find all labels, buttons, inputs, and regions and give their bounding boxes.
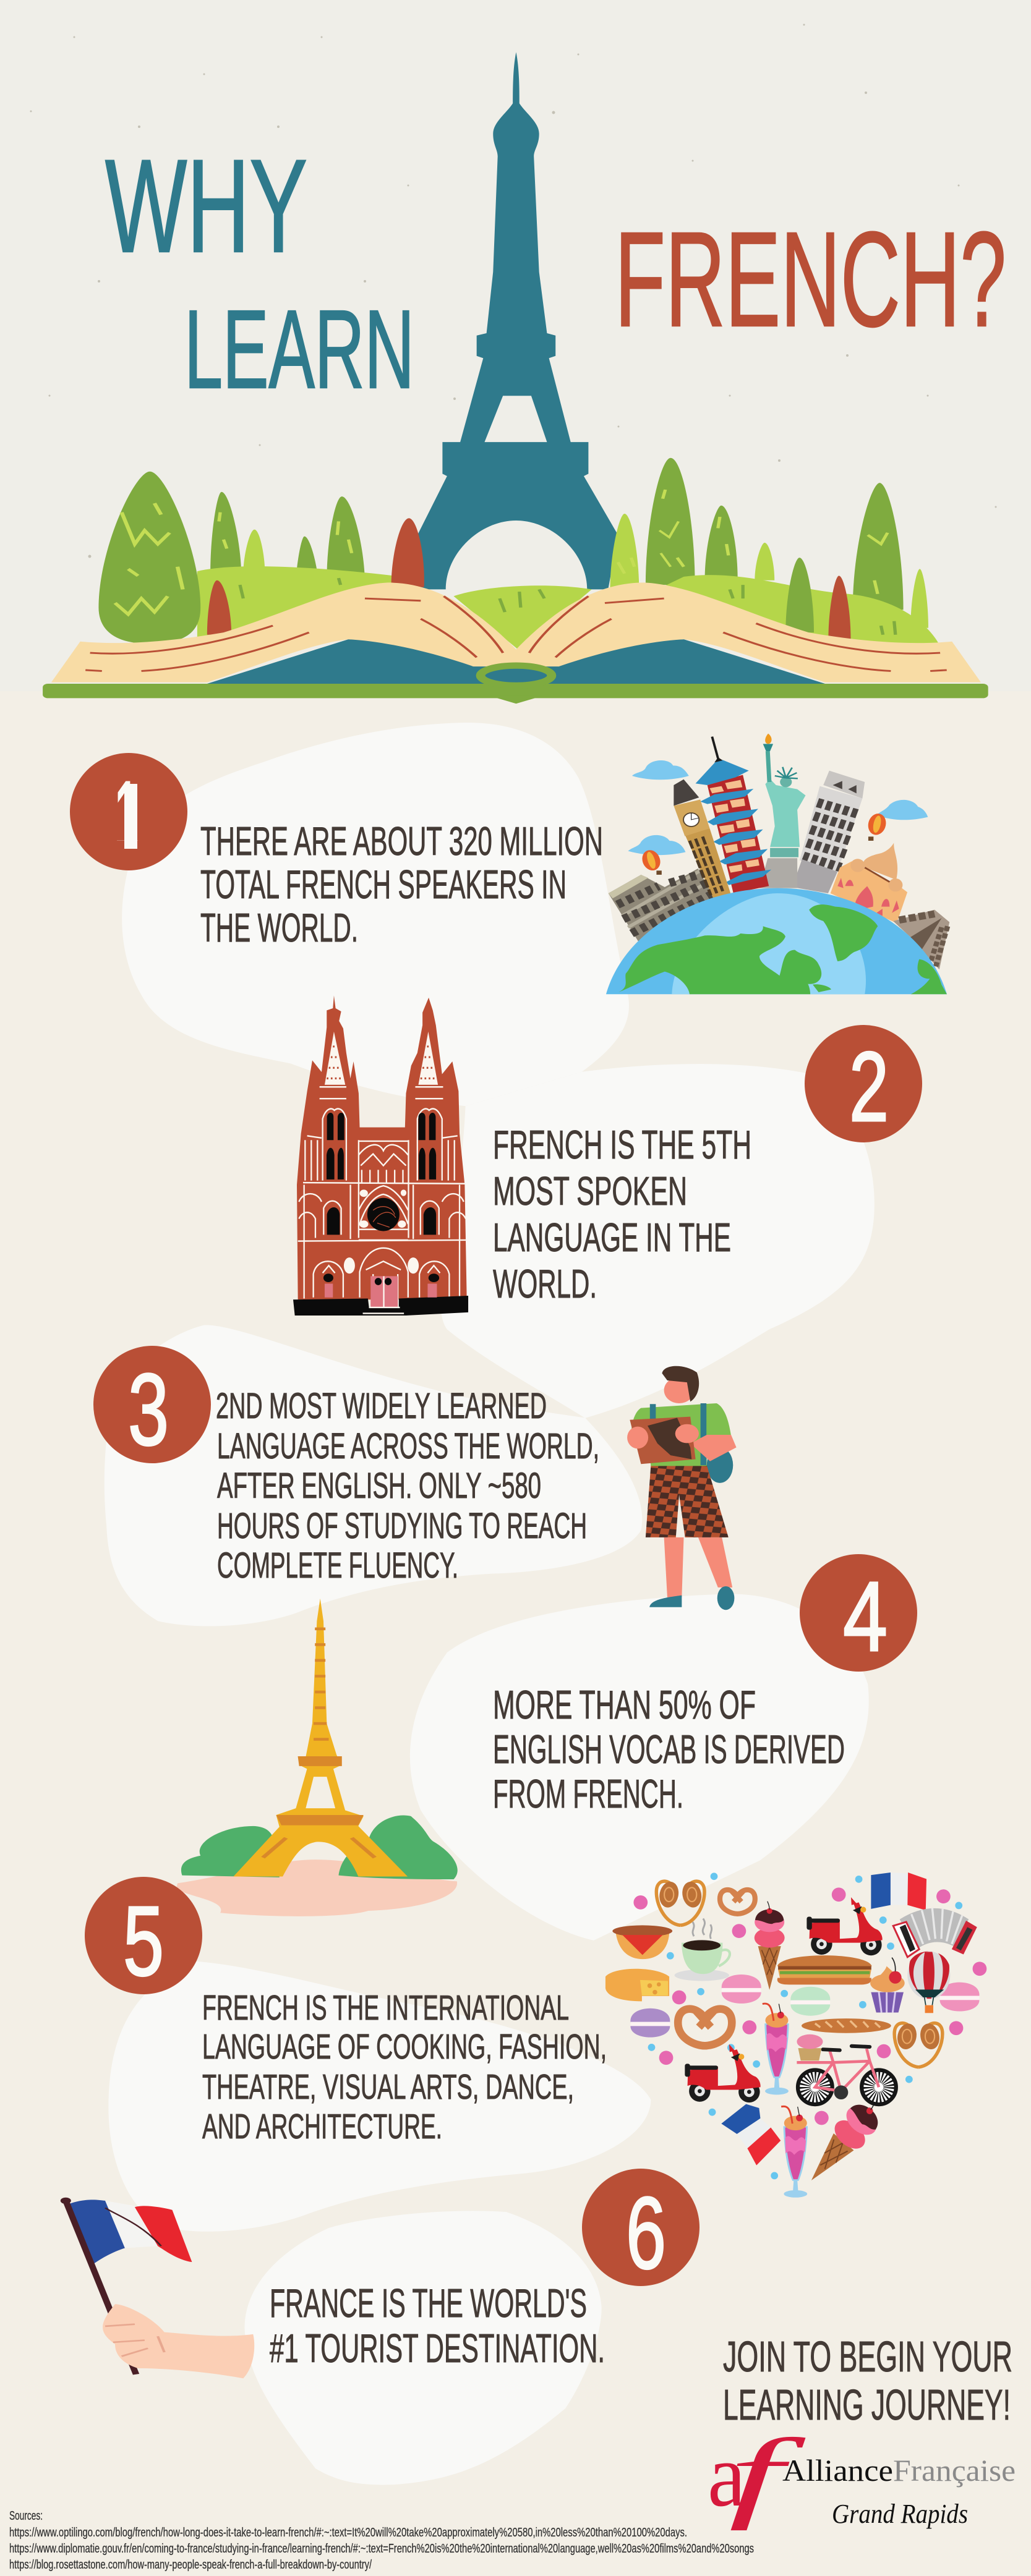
text block: fact 5: FRENCH IS THE INTERNATIONAL (202, 1988, 569, 2028)
sources: Sources: (9, 2509, 43, 2523)
logo: Alliance Française Grand Rapids: Grand Rapids (832, 2499, 968, 2529)
accordion (893, 1908, 977, 1957)
french flag bottom (721, 2104, 781, 2166)
bicycle (797, 2034, 896, 2104)
logo: Alliance Française Grand Rapids: Française (893, 2453, 1016, 2488)
pyramid (893, 910, 949, 969)
badge: number 1 (70, 753, 187, 870)
sandwich (777, 1955, 872, 1984)
book inner blue (207, 639, 825, 684)
badge: number 6: 6 (626, 2176, 666, 2290)
milkshakes (763, 2004, 789, 2094)
call to action (723, 2332, 1012, 2429)
header background panel (0, 0, 1031, 691)
logo: Alliance Française Grand Rapids: f (729, 2418, 806, 2531)
text block: fact 5 (202, 1988, 607, 2146)
colosseum (609, 867, 714, 942)
badge: number 6 (582, 2169, 699, 2290)
coffee cup (675, 1918, 730, 1981)
panel: blob 1 background (122, 723, 629, 1106)
illustration: golden Eiffel tower with bushes (176, 1599, 458, 1916)
title: WHY: WHY (105, 132, 307, 280)
text block: fact 1: TOTAL FRENCH SPEAKERS IN (200, 862, 567, 907)
text block: fact 2: FRENCH IS THE 5TH (493, 1122, 751, 1167)
clouds (628, 760, 928, 855)
text block: fact 2: MOST SPOKEN (493, 1168, 687, 1214)
text block: fact 5: LANGUAGE OF COOKING, FASHION, (202, 2027, 607, 2067)
text block: fact 3: HOURS OF STUDYING TO REACH (217, 1506, 587, 1546)
badge: number 2 (805, 1025, 922, 1142)
blue dots (648, 1872, 962, 2179)
book spine ring (481, 666, 552, 686)
globe (606, 888, 947, 994)
badge: number 2: 2 (849, 1031, 889, 1142)
book right page (513, 582, 981, 682)
scooters (806, 1897, 883, 1955)
pink dots (633, 1887, 986, 2125)
text block: fact 6: #1 TOURIST DESTINATION. (270, 2326, 605, 2371)
text block: fact 2: LANGUAGE IN THE (493, 1215, 731, 1260)
badge: number 1: 1 (114, 762, 140, 870)
illustration: traveler reading a map (627, 1366, 737, 1610)
text block: fact 4: MORE THAN 50% OF (493, 1682, 756, 1727)
baguette (802, 2018, 891, 2033)
badge: number 5 (85, 1877, 202, 1996)
badge: number 4 (800, 1554, 917, 1672)
logo: Alliance Française Grand Rapids (708, 2418, 1016, 2531)
logo: Alliance Française Grand Rapids: a (708, 2425, 746, 2525)
text block: fact 6 (270, 2281, 605, 2371)
text block: fact 2 (493, 1122, 751, 1306)
badge: number 3 (93, 1346, 211, 1466)
illustration: gothic cathedral (293, 995, 468, 1316)
tart (612, 1925, 672, 1959)
pretzels (720, 1890, 755, 1914)
panel: blob 4 background (410, 1594, 869, 1941)
logo: Alliance Française Grand Rapids: Alliance (782, 2453, 893, 2488)
hot air balloon (907, 1952, 950, 2013)
big ben (674, 780, 730, 898)
statue of liberty (759, 734, 806, 888)
text block: fact 3: LANGUAGE ACROSS THE WORLD, (217, 1426, 599, 1466)
text block: fact 4 (493, 1682, 845, 1816)
badge: number 4: 4 (843, 1561, 888, 1672)
text block: fact 3 (216, 1386, 599, 1586)
header illustration: Eiffel tower on open book with trees (43, 52, 988, 704)
text block: fact 5: AND ARCHITECTURE. (202, 2107, 442, 2146)
hot air balloons (640, 812, 888, 875)
sources (9, 2509, 754, 2572)
text block: fact 3: AFTER ENGLISH. ONLY ~580 (217, 1466, 541, 1506)
panel: blob 3 background (105, 1325, 642, 1626)
book cover base (43, 684, 988, 698)
text block: fact 6: FRANCE IS THE WORLD'S (270, 2281, 587, 2326)
cheese (605, 1969, 669, 2001)
illustration: heart of French food and icons (605, 1872, 986, 2198)
text block: fact 4: FROM FRENCH. (493, 1771, 683, 1816)
french flag top (871, 1872, 926, 1910)
pagoda (696, 737, 771, 893)
macarons (722, 1975, 761, 2004)
trees front row (98, 472, 200, 644)
sources: https://blog.rosettastone.com/how-many-people-speak-french-a-full-breakdown-by-country/ (9, 2558, 372, 2572)
text block: fact 1: THE WORLD. (200, 905, 358, 950)
illustration: hand holding french flag (61, 2198, 254, 2378)
text block: fact 2: WORLD. (493, 1261, 597, 1306)
text block: fact 1 (200, 818, 603, 950)
sources: https://www.diplomatie.gouv.fr/en/coming-to-france/studying-in-france/learning-french/#:~:text=French%20is%20the%20international%20language,well%20as%20films%20and%20songs (9, 2542, 754, 2556)
illustration: globe with world monuments (606, 734, 949, 994)
sources: https://www.optilingo.com/blog/french/how-long-does-it-take-to-learn-french/#:~:text=It%20will%20take%20approximately%20580,in%20less%20than%20100%20days. (9, 2526, 687, 2540)
badge: number 5: 5 (123, 1885, 164, 1996)
cupcake (870, 1958, 905, 2012)
text block: fact 1: THERE ARE ABOUT 320 MILLION (200, 818, 603, 864)
book left page (51, 582, 520, 682)
grass ticks (240, 578, 896, 635)
ice cream cones (755, 1902, 785, 1990)
palmier pastries (656, 1880, 704, 1925)
pisa tower (792, 771, 865, 893)
title: LEARN: LEARN (184, 287, 414, 412)
panel: blob 6 background (244, 2211, 602, 2485)
taj mahal (831, 843, 907, 923)
badge: number 3: 3 (128, 1353, 169, 1466)
panel: blob 5 background (108, 1962, 651, 2232)
text block: fact 5: THEATRE, VISUAL ARTS, DANCE, (202, 2067, 574, 2107)
icon: teal Eiffel tower (414, 52, 618, 589)
panel: blob 2 background (441, 1064, 875, 1418)
text block: fact 3: 2ND MOST WIDELY LEARNED (216, 1386, 547, 1426)
tree markings (219, 490, 888, 594)
text block: fact 3: COMPLETE FLUENCY. (217, 1545, 458, 1586)
light green hills (197, 566, 940, 650)
trees back row (210, 458, 904, 610)
book page lines (85, 596, 947, 671)
